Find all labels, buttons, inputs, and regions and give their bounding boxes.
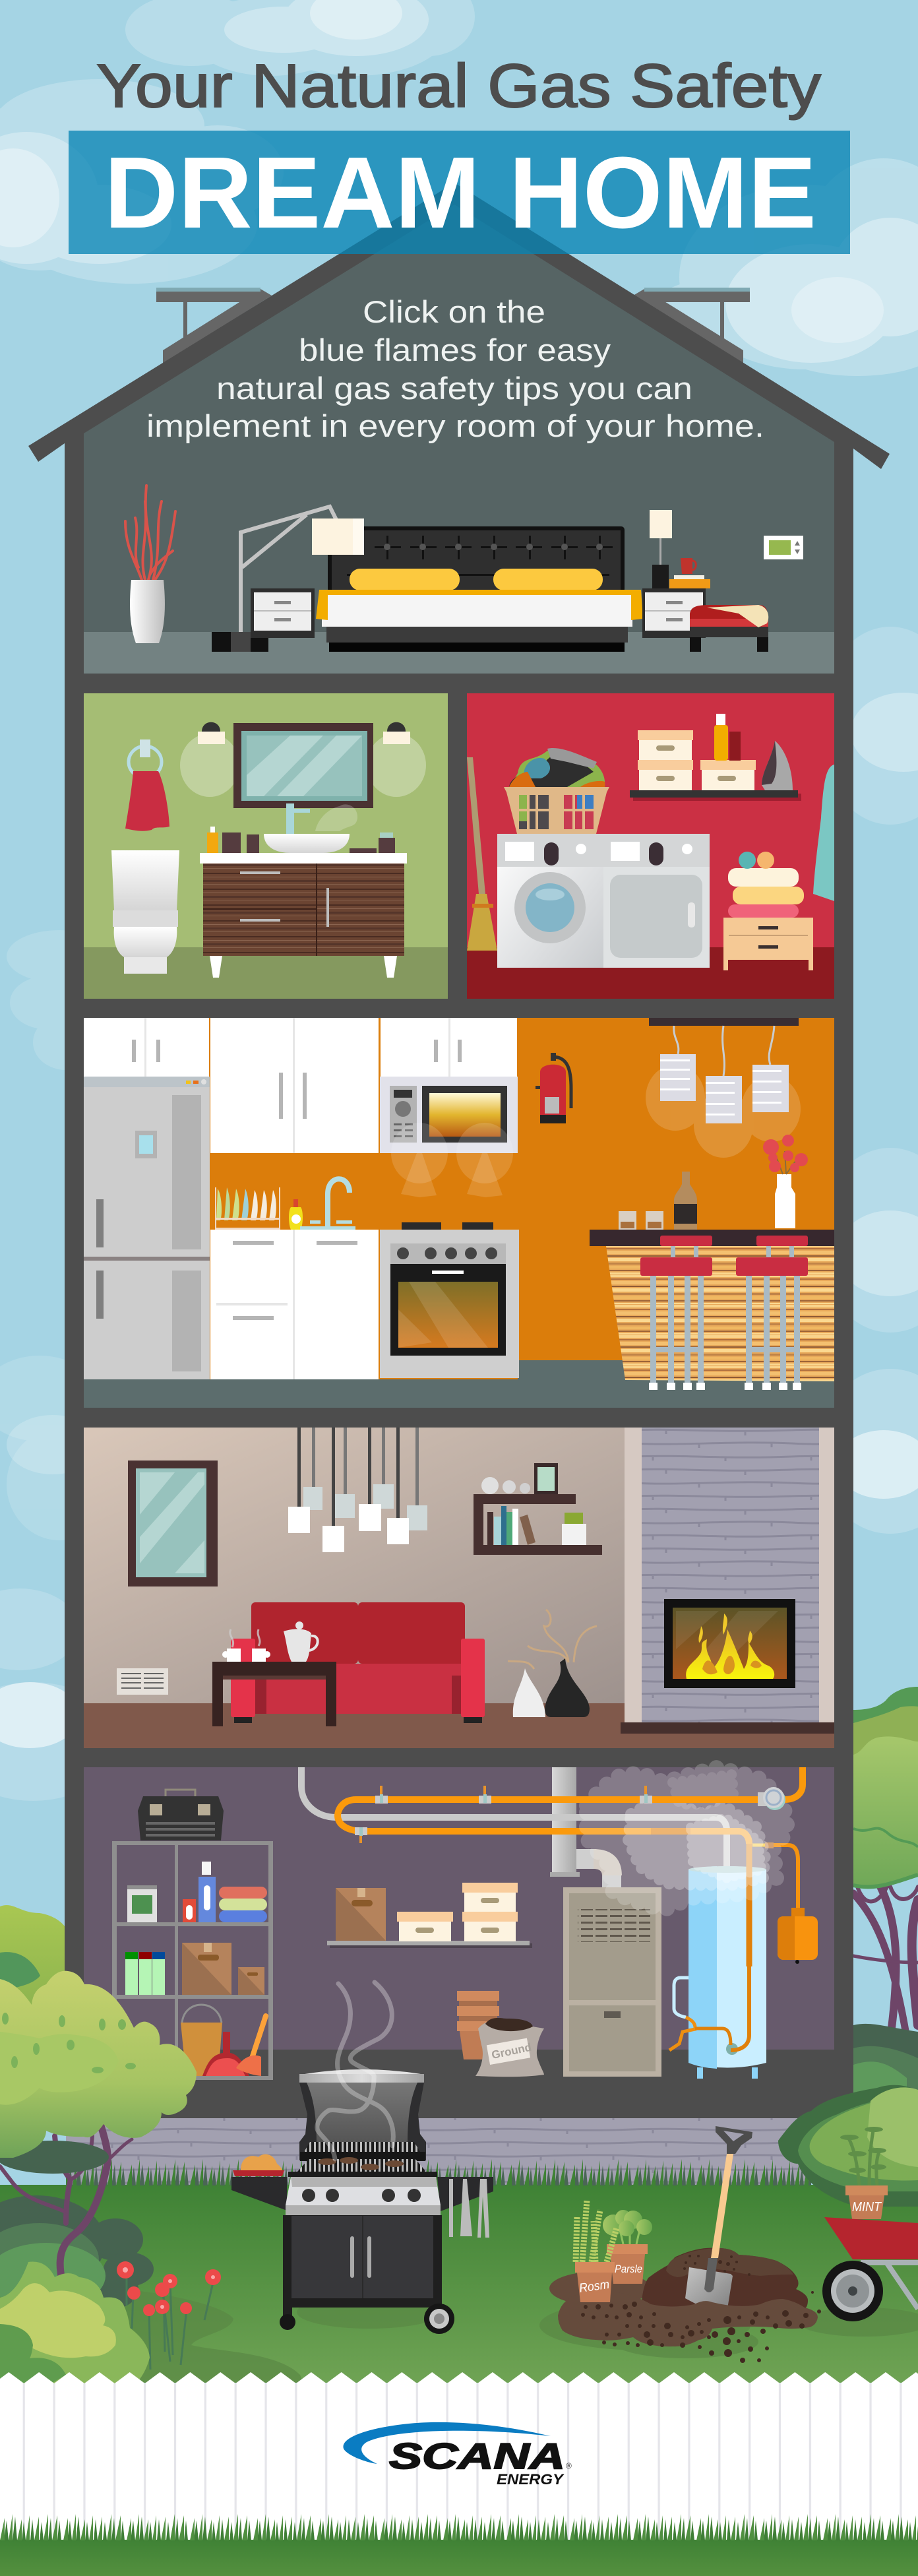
mint pot: MINT: [852, 2200, 882, 2215]
glasses, bottle, flower vase on bar: [619, 1135, 808, 1230]
flower pots and soil bag: [457, 1991, 544, 2077]
cloud: upper right: [646, 158, 918, 376]
wheelbarrow: [822, 2217, 918, 2321]
lawn: [0, 2185, 918, 2383]
red sofa: [231, 1602, 485, 1723]
right garden bush: [778, 2085, 918, 2207]
bar stools: [640, 1236, 808, 1390]
laundry shelf with boxes, bottles and iron: [630, 714, 801, 801]
metal storage rack: [112, 1841, 273, 2080]
grill cabinet: [283, 2215, 442, 2315]
SCANA Energy logo: ®: [566, 2461, 572, 2470]
sink and faucet: [264, 803, 357, 853]
under-cabinet lights: [391, 1123, 513, 1197]
floor lamp: [212, 507, 364, 652]
storage shelf with boxes: [327, 1883, 532, 1948]
bathroom mirror: [233, 723, 373, 808]
base cabinets: [210, 1230, 379, 1379]
panel: laundry room: [467, 693, 834, 999]
leaves: [2, 2013, 136, 2073]
SCANA Energy logo: SCANA: [389, 2435, 565, 2476]
foreground grass blades: [0, 2514, 918, 2540]
gas leak smoke cloud: [587, 1768, 787, 1908]
intro text: [146, 294, 764, 443]
toolbox: [138, 1790, 224, 1840]
expansion tank: [778, 1908, 818, 1964]
rosemary pot: Rosm: [578, 2278, 610, 2296]
foreground grass band: [0, 2540, 918, 2576]
vanity cabinet: [200, 853, 407, 978]
panel: basement: [84, 1767, 834, 2118]
bed: [316, 526, 643, 652]
left back tree: [0, 1905, 86, 2058]
fire extinguisher: [536, 1053, 571, 1123]
pipe clips: [355, 1786, 652, 1843]
breakfast bar: [590, 1230, 834, 1381]
stove and oven: [380, 1222, 519, 1378]
refrigerator: [84, 1077, 210, 1379]
dark bush behind right side: [853, 2024, 918, 2098]
right tree behind house: [853, 1687, 918, 2098]
house shell and roof: [28, 183, 890, 2118]
banner: DREAM HOME: [104, 136, 816, 249]
folded towels on small cabinet: [723, 852, 813, 970]
left tree canopy: [0, 1971, 197, 2174]
panel: bathroom: [84, 693, 448, 999]
red garden flowers: [117, 2261, 221, 2370]
white picket fence: [0, 2372, 918, 2540]
dish soap: [289, 1199, 303, 1230]
clouds: left side: [0, 930, 119, 1801]
ottoman with blanket: [690, 605, 768, 652]
hanging pendant lights: [288, 1428, 427, 1552]
parsley pot: [603, 2210, 652, 2284]
left tree trunk: [0, 2125, 132, 2282]
fireplace: [621, 1428, 834, 1734]
SCANA Energy logo: [343, 2422, 572, 2488]
pendant lights: [646, 1018, 801, 1158]
panel: bedroom: [84, 204, 834, 674]
tree trunks: [853, 1887, 918, 2038]
wall shelf with books and decor: [474, 1463, 602, 1555]
wall mirror: [128, 1461, 218, 1586]
sconces and glow: [180, 722, 426, 797]
furnace: [563, 1887, 661, 2077]
intro text: blue flames for easy: [299, 332, 611, 367]
vase with red branches: [125, 486, 175, 643]
grill grates and burgers: [288, 2142, 437, 2177]
left nightstand: [251, 588, 315, 638]
parsley pot: Parsle: [615, 2263, 642, 2275]
robe on hook: [813, 765, 834, 901]
towel ring and towel: [125, 739, 169, 831]
gas meter: [758, 1787, 785, 1810]
grill wheels: [280, 2304, 454, 2334]
left front bush: [0, 2261, 150, 2384]
mint pot: [840, 2127, 888, 2219]
intro text: natural gas safety tips you can: [216, 371, 692, 406]
shovel: [685, 2126, 752, 2309]
floor vent: [117, 1668, 168, 1695]
exhaust flue: [550, 1767, 622, 1887]
thermostat: [764, 536, 803, 559]
intro text: implement in every room of your home.: [146, 408, 764, 443]
intro text: Click on the: [363, 294, 545, 329]
left lower dark bush: [0, 2195, 154, 2309]
right nightstand, lamp, books, mug: [642, 510, 710, 638]
grill utensils: [449, 2179, 489, 2238]
panel: kitchen: [84, 1018, 834, 1408]
dryer: [603, 834, 710, 968]
laundry basket: [504, 748, 609, 834]
flower pots and soil bag: Ground: [491, 2041, 533, 2061]
washing machine: [497, 834, 603, 968]
title: Your Natural Gas Safety: [96, 51, 822, 120]
kitchen faucet: [300, 1179, 355, 1230]
toilet: [111, 850, 179, 974]
panel: living room: [84, 1428, 834, 1748]
bathroom counter items: [207, 827, 395, 853]
soil foreground heap: [558, 2255, 821, 2363]
coffee table with teapot and cups: [212, 1621, 336, 1726]
SCANA Energy logo: ENERGY: [497, 2471, 565, 2488]
grey water pipe: [301, 1767, 727, 1868]
upper orange gas line: [338, 1767, 803, 1831]
rosemary pot: [575, 2200, 617, 2302]
herb garden soil mound: [549, 2248, 808, 2325]
cloud: top centre: [125, 0, 475, 76]
grill steam: [317, 1982, 393, 2159]
broom: [467, 757, 497, 951]
garden shadows: [119, 2289, 918, 2383]
grill control panel: [286, 2177, 441, 2215]
foundation stone wall: [66, 2118, 811, 2185]
lower orange gas lines: [364, 1831, 798, 2050]
roof deck left: [156, 288, 272, 363]
decorative vases with branches: [508, 1610, 597, 1717]
water heater: [674, 1866, 766, 2079]
back grass blades: [66, 2159, 811, 2185]
grill side shelves: [231, 2154, 493, 2211]
barbecue grill: [231, 1982, 493, 2334]
clouds: right side: [818, 627, 918, 1534]
roof deck right: [633, 288, 750, 363]
grill hood: [299, 2069, 426, 2160]
upper cabinets: [84, 1018, 517, 1153]
cloud: upper left: [0, 79, 284, 284]
dish rack: [215, 1187, 280, 1230]
microwave: [380, 1077, 518, 1153]
basement floor: [84, 2050, 834, 2118]
right tree canopy: [853, 1736, 918, 1885]
